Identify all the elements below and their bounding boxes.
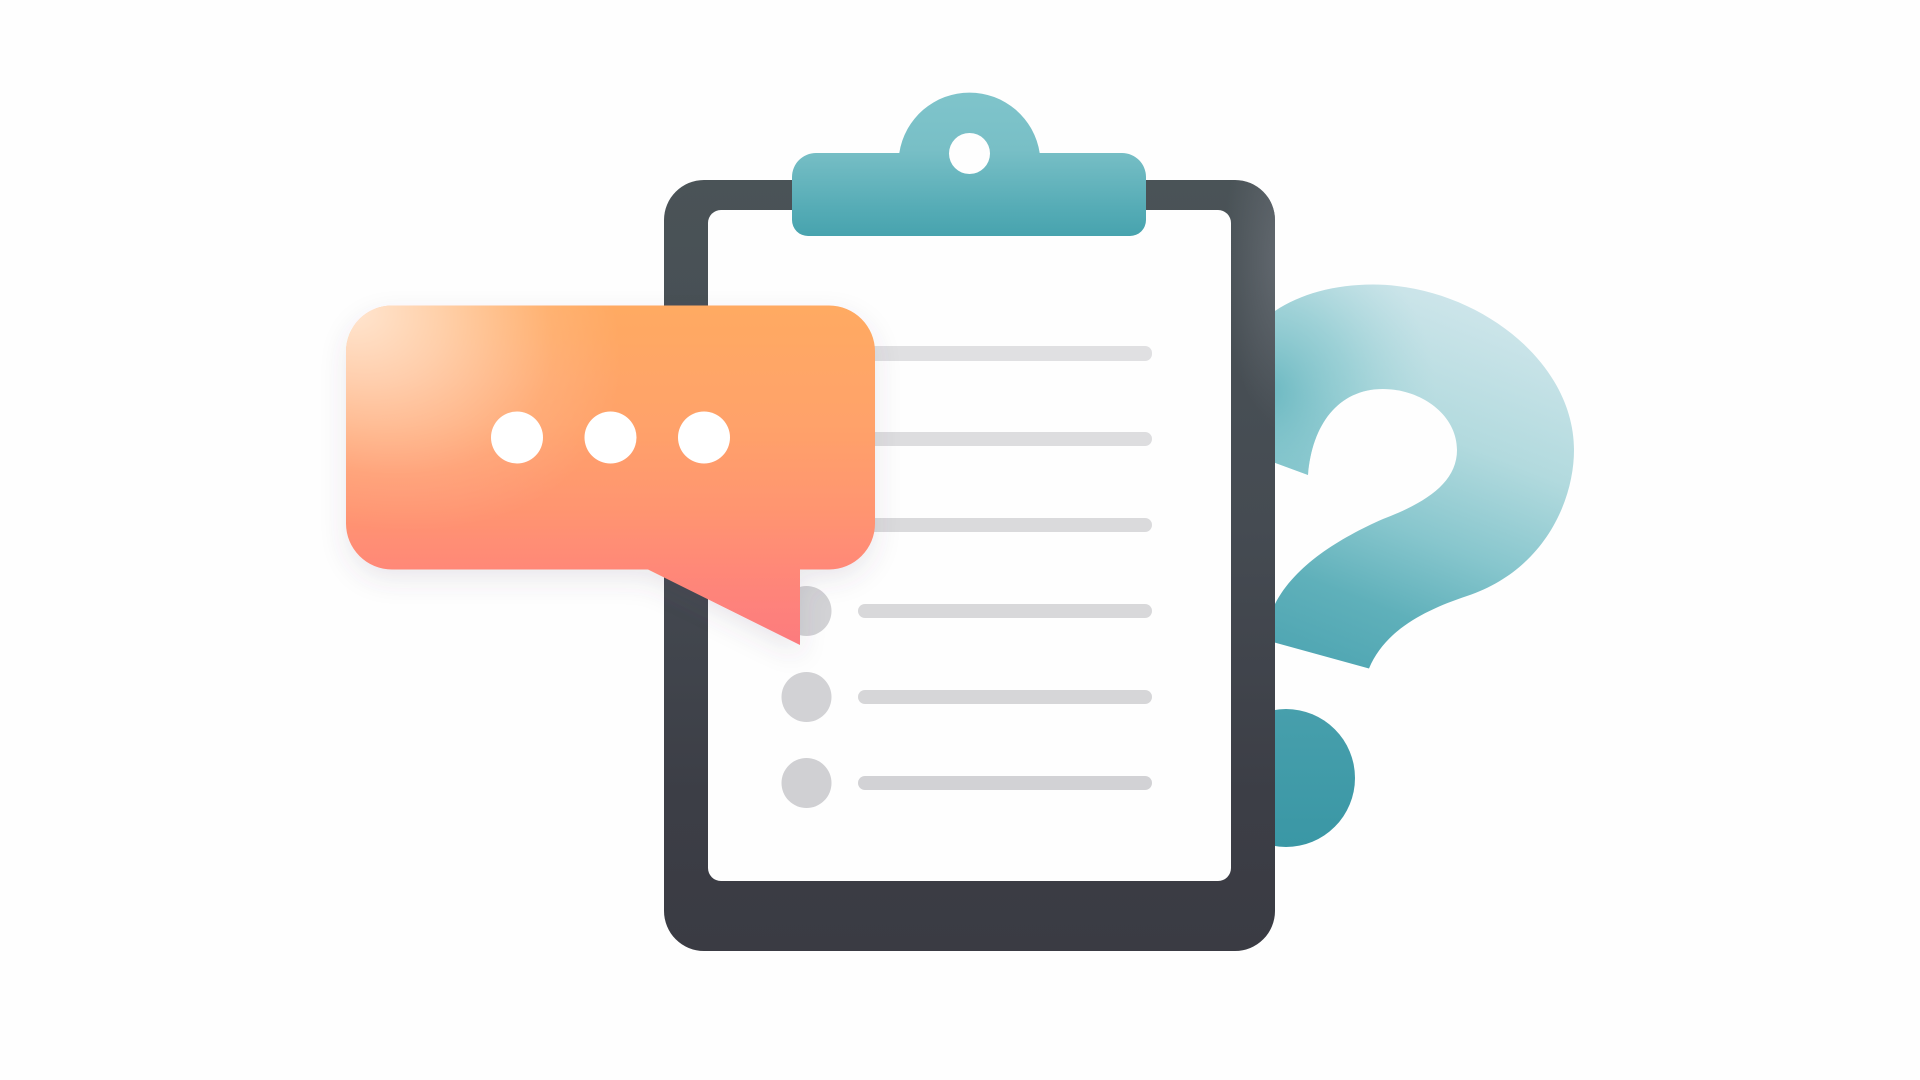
- row 6: [782, 758, 1152, 808]
- clipboard: [664, 93, 1275, 951]
- clipboard clip: [792, 93, 1146, 236]
- clipboard board: [664, 180, 1275, 951]
- clipboard paper: [708, 210, 1231, 881]
- row 5: [782, 672, 1152, 722]
- question mark hook shading: [1240, 284, 1574, 668]
- row 3: [782, 500, 1152, 550]
- clipboard board highlight: [1223, 180, 1275, 430]
- dot 1: [491, 412, 543, 464]
- dot 2: [584, 412, 636, 464]
- question mark dot: [1217, 709, 1355, 847]
- row 1: [782, 328, 1152, 378]
- checklist rows: [782, 328, 1152, 808]
- question mark hook: [1240, 284, 1574, 668]
- dot 3: [678, 412, 730, 464]
- bubble highlight: [346, 306, 875, 570]
- typing dots: [491, 412, 730, 464]
- bubble body and tail: [346, 306, 875, 645]
- row 4: [782, 586, 1152, 636]
- speech bubble: [346, 306, 875, 645]
- row 2: [782, 414, 1152, 464]
- icon: question mark behind clipboard: [1217, 284, 1574, 847]
